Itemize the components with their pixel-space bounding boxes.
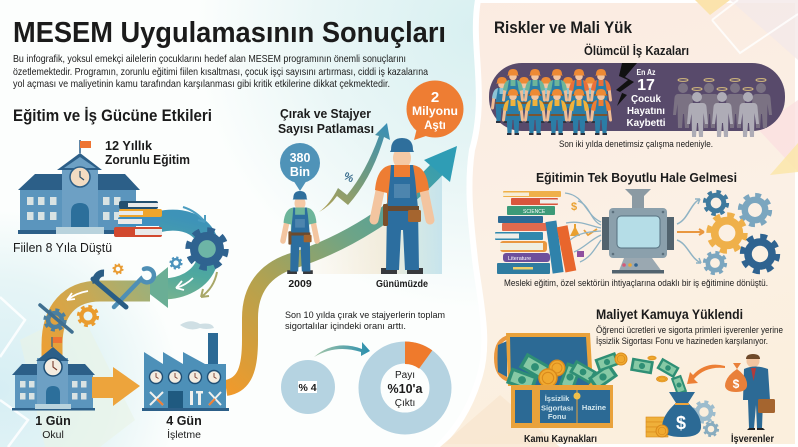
small worker 2009: [283, 191, 317, 274]
label: employers: İşverenler: [731, 432, 774, 445]
icon: businessman: $: [733, 377, 740, 391]
stat: 17 children: Çocuk: [631, 93, 661, 105]
text: share rose: [285, 310, 445, 332]
caption: accidents: Son iki yılda denetimsiz çalışma nedeniyle.: [559, 139, 713, 149]
icons: subject symbols: [570, 201, 597, 257]
text: share rose: Son 10 yılda çırak ve stajyerlerin toplam: [285, 310, 445, 321]
arrows: into machine: [565, 193, 601, 262]
text: cost description: İşsizlik Sigortası Fonu ve hazineden karşılanıyor.: [596, 336, 768, 346]
zigzag arrow: [319, 123, 390, 212]
zigzag arrow: %: [342, 170, 356, 186]
icon: treasure chest: [496, 333, 618, 428]
large worker today: [374, 138, 430, 274]
label: 12 year compulsory education: 12 Yıllık: [105, 139, 152, 153]
label: 12 year compulsory education: Zorunlu Eğitim: [105, 153, 190, 167]
text: share rose: sigortalılar içindeki oranı arttı.: [285, 321, 406, 332]
panel: fatal accidents: [489, 63, 785, 131]
arrow: employers to fund: [687, 365, 725, 384]
stat: 17 children: 17: [637, 77, 655, 94]
heading: education and labour: Eğitim ve İş Gücüne Etkileri: [13, 107, 212, 125]
icon: stack of books: Literature: [508, 256, 531, 262]
stat: 17 children: Hayatını: [627, 105, 665, 117]
flying money: [594, 352, 687, 395]
bubble: 2 million: Aştı: [424, 120, 446, 132]
arrow: school to factory: [92, 367, 140, 406]
growth arrow: [226, 146, 457, 388]
stat: 17 children: Kaybetti: [626, 117, 666, 129]
donut: 10 percent: [370, 342, 440, 424]
heading: one-dimensional education: Eğitimin Tek Boyutlu Hale Gelmesi: [536, 170, 737, 185]
icon: treasure chest: İşsizlik: [545, 394, 570, 403]
circle: 4 percent: % 4: [298, 382, 317, 394]
intro text: [13, 53, 428, 90]
label: 1 day school: Okul: [42, 429, 64, 441]
icon: small gears: [45, 257, 182, 330]
icon: main gear: [189, 231, 225, 267]
heading: apprentice boom: [278, 106, 374, 136]
icon: treasure chest: Sigortası: [541, 404, 573, 412]
stat: 17 children: En Az: [636, 68, 656, 77]
icon: treasure chest: Hazine: [582, 403, 606, 412]
icon: machine: [602, 189, 674, 274]
bubble: 380 thousand: 380: [290, 151, 310, 165]
label: 1 day school: [35, 414, 71, 441]
icon: money bag: $: [676, 413, 686, 433]
bubble: 380 thousand: [280, 143, 320, 191]
heading: fatal accidents: Ölümcül İş Kazaları: [584, 43, 689, 58]
intro text: özetlemektedir. Programın, zorunlu eğitimi fiilen kısaltması, çocuk işçi sayısını artırması, ciddi iş kazalarına: [13, 66, 428, 78]
label: public resources: Kamu Kaynakları: [524, 433, 597, 445]
donut: 10 percent: Payı: [395, 370, 415, 381]
icon: crossed wrenches: [40, 268, 154, 332]
circle: 4 percent: [281, 360, 335, 414]
small school: [12, 337, 95, 410]
text: cost description: Öğrenci ücretleri ve sigorta primleri işverenler yerine: [596, 325, 783, 335]
workers group: [492, 69, 611, 135]
title: MESEM Uygulamasının Sonuçları: [13, 17, 446, 49]
heading: risks: Riskler ve Mali Yük: [494, 19, 633, 37]
crack: [616, 63, 637, 106]
ghost figures: [673, 79, 772, 137]
icon: book stack: [114, 201, 162, 237]
label: fell to 8 years: Fiilen 8 Yıla Düştü: [13, 240, 112, 255]
bubble: 2 million: Milyonu: [412, 106, 458, 118]
arrows: out of machine: [677, 199, 704, 263]
stat: 17 children: [626, 68, 666, 129]
intro text: Bu infografik, yoksul emekçi ailelerin çocuklarını hedef alan MESEM programının önemli sonuçlarını: [13, 53, 406, 65]
icon: stack of books: [495, 191, 576, 274]
donut: 10 percent: Çıktı: [395, 398, 415, 409]
bubble: 2 million: 2: [431, 89, 439, 106]
label: 4 days workplace: [166, 414, 202, 441]
label: 1 day school: 1 Gün: [35, 414, 71, 428]
icon: treasure chest: Fonu: [548, 412, 567, 421]
icon: gears output: [705, 192, 777, 273]
icon: factory: [142, 321, 229, 411]
curved arrow: school to work: [52, 207, 217, 372]
icon: businessman: [725, 354, 775, 430]
intro text: yol açması ve maliyetinin kamu tarafından karşılanması gibi kritik etkilerine dikkat çekmektedir.: [13, 78, 390, 90]
large school: [18, 140, 140, 234]
label: today: Günümüzde: [376, 278, 428, 290]
bubble: 2 million: [406, 80, 464, 140]
heading: cost: Maliyet Kamuya Yüklendi: [596, 307, 743, 322]
label: 2009: 2009: [288, 278, 312, 290]
text: cost description: [596, 325, 783, 346]
icons: subject symbols: $: [571, 201, 577, 213]
label: 4 days workplace: 4 Gün: [166, 414, 202, 428]
arrow: 4 to 10: [314, 342, 370, 357]
icon: money bag: [646, 392, 718, 437]
bubble: 380 thousand: Bin: [290, 165, 310, 179]
label: 12 year compulsory education: [105, 139, 190, 167]
label: 4 days workplace: İşletme: [167, 428, 201, 441]
heading: apprentice boom: Sayısı Patlaması: [278, 121, 374, 136]
icon: stack of books: SCIENCE: [523, 209, 546, 215]
heading: apprentice boom: Çırak ve Stajyer: [280, 106, 371, 121]
donut: 10 percent: %10'a: [388, 382, 424, 396]
